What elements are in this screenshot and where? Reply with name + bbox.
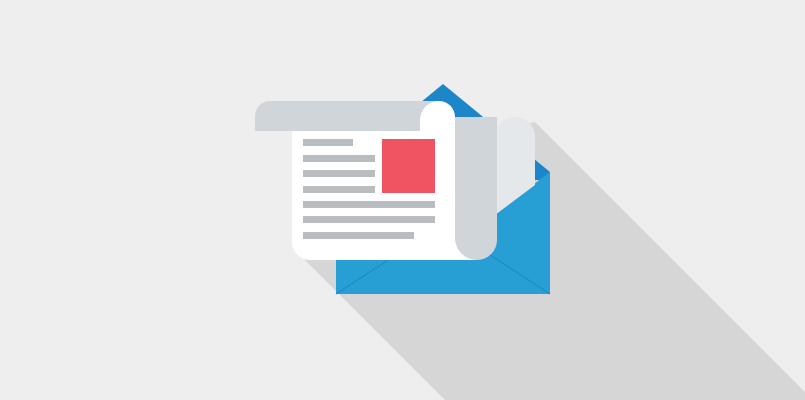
right roll gray bbox=[440, 117, 497, 260]
white page bbox=[292, 101, 477, 260]
right roll light bbox=[495, 117, 535, 215]
top curl bar bbox=[255, 101, 440, 131]
text lines bbox=[303, 139, 435, 239]
image placeholder bbox=[382, 139, 435, 193]
icon: envelope bbox=[336, 84, 550, 294]
long shadow bbox=[295, 122, 805, 400]
icon: newspaper scroll bbox=[255, 101, 535, 260]
